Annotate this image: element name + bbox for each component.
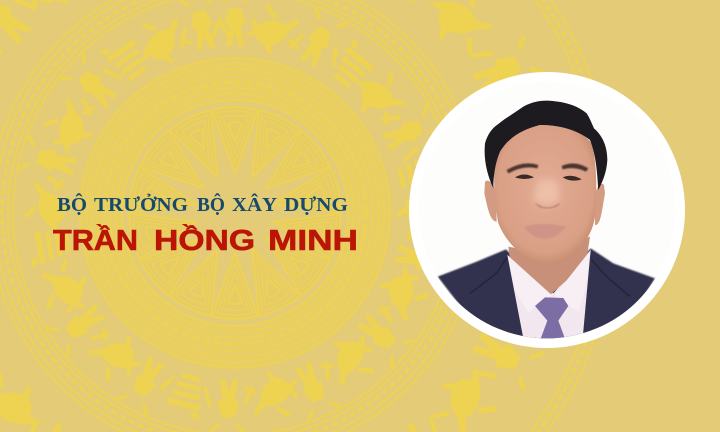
heading: position: DỰNG xyxy=(284,194,348,216)
heading: name: MINH xyxy=(268,225,358,257)
tie xyxy=(535,297,568,339)
eyebrows xyxy=(507,163,588,173)
eyes xyxy=(515,174,582,181)
heading: position: TRƯỞNG xyxy=(94,193,188,216)
heading: position xyxy=(57,192,348,216)
neck xyxy=(508,237,590,295)
lapels xyxy=(470,257,630,297)
photo backdrop xyxy=(419,82,675,338)
heading: name: TRẦN xyxy=(53,223,138,257)
ears xyxy=(484,181,605,225)
heading: name xyxy=(53,223,358,257)
mouth xyxy=(524,224,566,239)
collar xyxy=(507,250,591,295)
facial shading xyxy=(533,180,560,205)
heading: position: XÂY xyxy=(232,192,278,216)
jacket xyxy=(438,248,655,343)
heading: name: HỒNG xyxy=(154,223,255,257)
portrait frame xyxy=(409,72,685,348)
heading: position: BỘ xyxy=(57,193,87,216)
hair xyxy=(485,101,607,190)
shirt xyxy=(507,250,591,338)
portrait photo xyxy=(437,100,656,338)
heading: position: BỘ xyxy=(197,193,225,216)
nose xyxy=(535,203,561,208)
face xyxy=(494,125,596,264)
